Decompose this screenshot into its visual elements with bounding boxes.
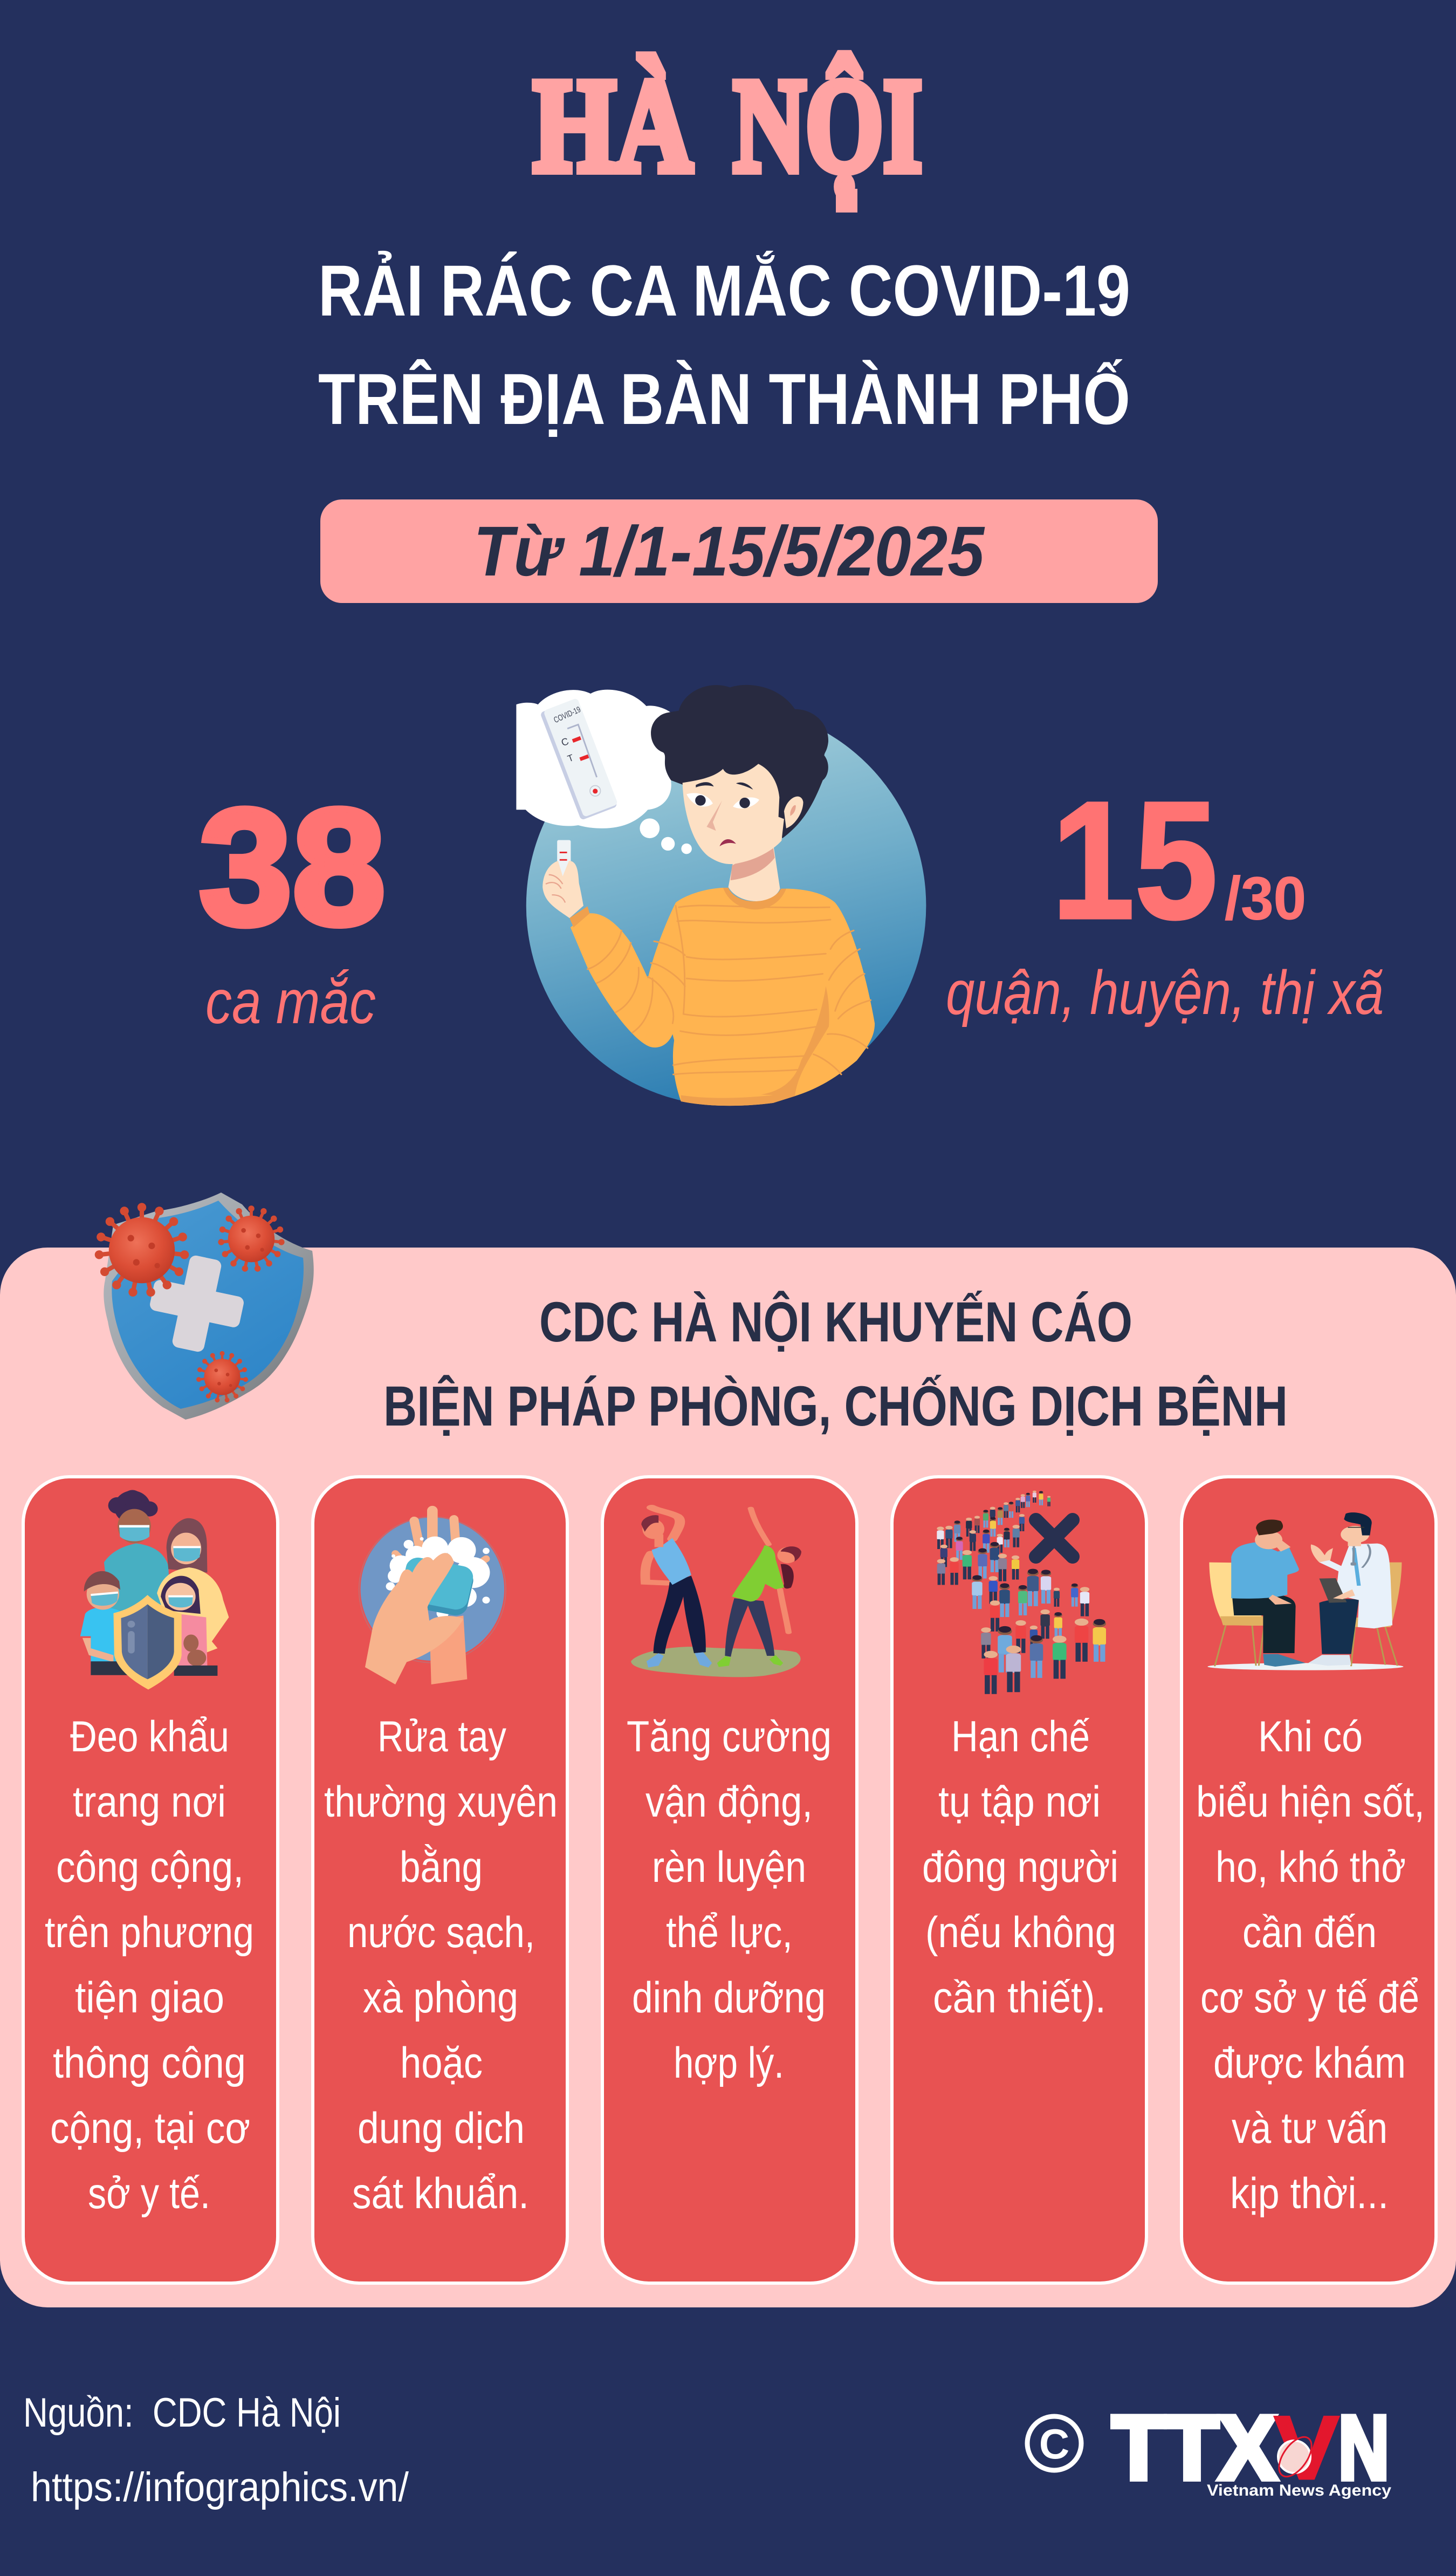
website: https://infographics.vn/ [31, 2464, 409, 2510]
card text: thể lực, [666, 1908, 793, 1957]
medium virus [218, 1205, 285, 1272]
card text: biểu hiện sốt, [1196, 1778, 1425, 1826]
illustration: worried person with test [516, 685, 926, 1106]
card text: Hạn chế [951, 1712, 1090, 1761]
stat: 15/30 districts [946, 766, 1384, 1027]
card text: bằng [400, 1843, 483, 1892]
card text [1196, 1712, 1425, 2218]
card text: cần đến [1242, 1908, 1377, 1957]
card text: trên phương [45, 1908, 254, 1957]
panel heading: CDC HÀ NỘI KHUYẾN CÁO [539, 1290, 1132, 1354]
sweater [571, 888, 875, 1106]
card text: ho, khó thở [1215, 1843, 1406, 1892]
logo: TTXVN [1112, 2397, 1391, 2499]
card text: trang nơi [73, 1778, 226, 1826]
icon: masked family with shield [80, 1490, 229, 1690]
card text: tụ tập nơi [938, 1778, 1101, 1826]
icon: shield with viruses [94, 1193, 314, 1420]
icon: patient and doctor [1207, 1512, 1403, 1670]
title: Hà Nội: NỘI [733, 51, 922, 200]
test cassette: T [566, 752, 575, 764]
card text: đông người [922, 1843, 1118, 1892]
card text: sát khuẩn. [352, 2169, 529, 2218]
card text: thông công [53, 2039, 246, 2087]
panel heading [383, 1290, 1288, 1438]
test cassette: C [560, 735, 570, 748]
date pill: Từ 1/1-15/5/2025 [473, 511, 985, 591]
panel heading: BIỆN PHÁP PHÒNG, CHỐNG DỊCH BỆNH [383, 1374, 1288, 1438]
card text: thường xuyên [324, 1778, 558, 1826]
logo: TTXVN: V [1274, 2397, 1340, 2498]
hair [651, 685, 828, 838]
test cassette: COVID-19 [552, 705, 582, 725]
card text: dinh dưỡng [632, 1974, 826, 2022]
card text: được khám [1213, 2039, 1406, 2087]
logo: TTXVN: Vietnam News Agency [1207, 2482, 1391, 2499]
card text: Đeo khẩu [70, 1712, 229, 1761]
heading [318, 250, 1130, 440]
card text: rèn luyện [652, 1843, 806, 1892]
card 2: hand washing [313, 1477, 567, 2283]
card 5: see a doctor [1182, 1477, 1436, 2283]
gradient circle [526, 705, 926, 1106]
card text: công cộng, [56, 1843, 244, 1892]
card text [324, 1712, 558, 2218]
icon: two people stretching [631, 1508, 801, 1677]
large virus [94, 1203, 189, 1297]
card text: cơ sở y tế để [1200, 1974, 1419, 2022]
logo: TTXVN: TTX [1112, 2397, 1277, 2498]
logo: TTXVN: N [1338, 2397, 1389, 2498]
card text: nước sạch, [347, 1908, 535, 1957]
stat: 15/30 districts: 15 [1052, 766, 1218, 954]
card text: xà phòng [363, 1974, 518, 2022]
card text: Rửa tay [377, 1712, 506, 1761]
card text: tiện giao [75, 1974, 224, 2022]
card text: kịp thời... [1230, 2169, 1389, 2218]
face [683, 764, 784, 864]
stat: 38 cases: ca mắc [205, 968, 376, 1037]
icon: crowd of people [937, 1491, 1106, 1694]
small virus [196, 1351, 248, 1403]
card text: cần thiết). [933, 1974, 1106, 2022]
card text: hợp lý. [674, 2039, 784, 2087]
card text: hoặc [400, 2039, 483, 2087]
neck [729, 844, 780, 901]
card text [627, 1712, 832, 2087]
icon: washing hands with soap [359, 1511, 506, 1684]
date pill [320, 499, 1158, 603]
card text: sở y tế. [88, 2169, 210, 2218]
card text: Tăng cường [627, 1712, 832, 1761]
card text: Khi có [1258, 1712, 1363, 1761]
plus cross [142, 1248, 251, 1359]
card text [45, 1712, 254, 2218]
stat: 38 cases: 38 [199, 775, 386, 959]
card text: vận động, [645, 1778, 813, 1826]
stat: 38 cases [199, 775, 386, 1037]
icon: cross mark [1036, 1520, 1073, 1557]
heading: RẢI RÁC CA MẮC COVID-19 [318, 250, 1130, 331]
card text: (nếu không [925, 1908, 1116, 1957]
card text [922, 1712, 1118, 2022]
title: Hà Nội [533, 51, 922, 213]
title: Hà Nội: HÀ [533, 51, 692, 200]
card 1: masks [23, 1477, 278, 2283]
test cassette [540, 698, 619, 820]
card 4: avoid crowds [892, 1477, 1146, 2283]
card 3: exercise [602, 1477, 857, 2283]
hand holding mini test [542, 840, 589, 927]
panel: recommendations [0, 1248, 1456, 2307]
copyright mark [1027, 2416, 1081, 2470]
copyright mark: C [1039, 2420, 1069, 2468]
stat: 15/30 districts: quận, huyện, thị xã [946, 958, 1384, 1027]
card text: và tư vấn [1232, 2104, 1388, 2153]
thought cloud [516, 690, 692, 854]
source text: Nguồn: CDC Hà Nội [23, 2390, 341, 2436]
card text: dung dịch [358, 2104, 525, 2153]
heading: TRÊN ĐỊA BÀN THÀNH PHỐ [318, 359, 1130, 440]
stat: 15/30 districts: /30 [1225, 865, 1306, 932]
card text: cộng, tại cơ [50, 2104, 250, 2153]
